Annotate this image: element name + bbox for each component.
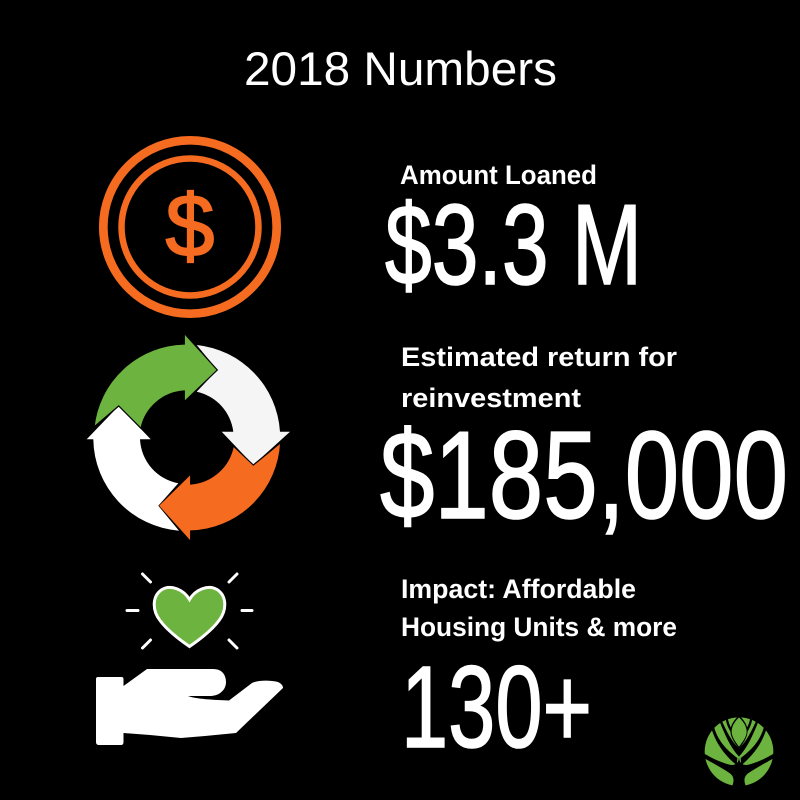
hand [96, 669, 283, 745]
label: housing units: Housing Units & more [401, 612, 677, 642]
text block: amount loaned [385, 160, 642, 309]
arrow: orange [158, 443, 281, 542]
logo: green tree [700, 715, 778, 787]
arrow: green [94, 333, 217, 428]
label: estimated return: Estimated return for [401, 342, 678, 372]
label: amount loaned: Amount Loaned [400, 160, 597, 190]
number: amount loaned: $3.3 M [385, 182, 642, 309]
icon: dollar coin: $ [166, 176, 214, 275]
arrow: light grey [197, 345, 290, 465]
centre leaf [732, 717, 747, 747]
tree cuts, right side [739, 715, 778, 787]
icon: hand holding heart [96, 574, 283, 745]
number: impact: 130+ [401, 642, 592, 772]
heart [154, 587, 225, 646]
text block: estimated return [380, 342, 788, 545]
title: 2018 Numbers [244, 42, 557, 95]
tree cuts, left side [700, 715, 739, 787]
rays [127, 574, 252, 648]
label: reinvestment: reinvestment [401, 383, 581, 413]
text block: impact [401, 574, 677, 772]
icon: cycle of four arrows [87, 333, 290, 542]
arrow: white [87, 406, 179, 531]
label: impact: Impact: Affordable [401, 574, 636, 604]
icon: dollar coin [103, 140, 277, 314]
